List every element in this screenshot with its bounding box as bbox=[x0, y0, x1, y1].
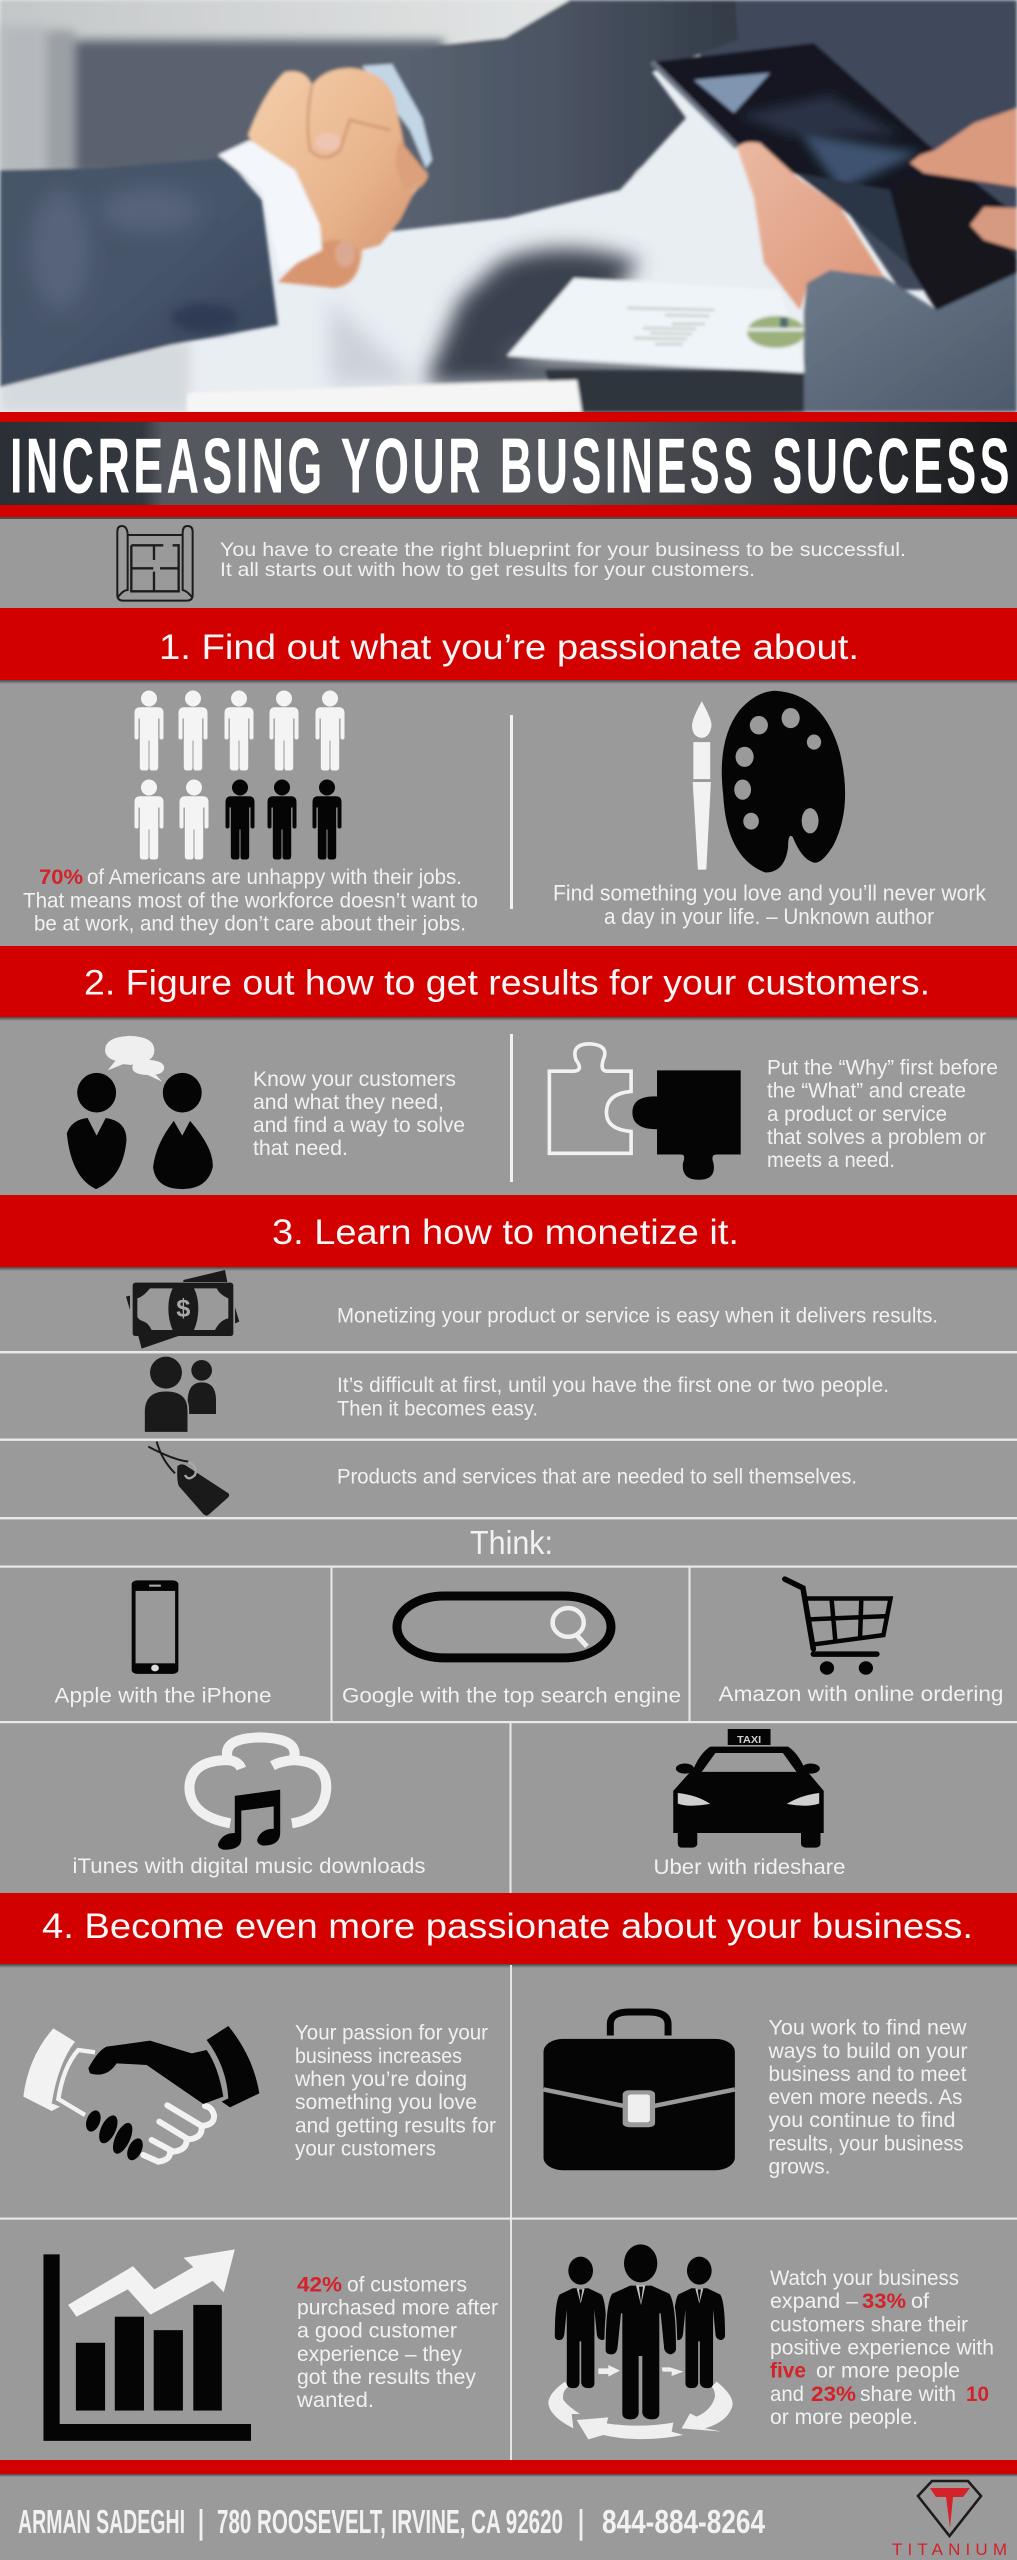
icon: taxi: TAXI bbox=[737, 1734, 761, 1746]
text: 33% and 23% statistics: 10 bbox=[966, 2383, 989, 2406]
logo: Titanium bbox=[892, 2481, 1007, 2559]
text: quote: a day in your life. – Unknown author bbox=[604, 904, 934, 929]
text: 33% and 23% statistics bbox=[770, 2267, 994, 2429]
text: 33% and 23% statistics: 23% bbox=[811, 2383, 856, 2406]
text: 42% statistic: a good customer bbox=[297, 2320, 457, 2342]
text: 42% statistic: 42% bbox=[297, 2274, 342, 2296]
text: 70% statistic: be at work, and they don’t care about their jobs. bbox=[34, 912, 466, 936]
icon: paintbrush and palette bbox=[692, 691, 845, 873]
icon: search bar bbox=[397, 1596, 611, 1658]
text: build: business and to meet bbox=[768, 2063, 967, 2086]
text: build bbox=[767, 2016, 968, 2178]
icon: two people talking bbox=[67, 1036, 213, 1189]
text: 33% and 23% statistics: expand – bbox=[770, 2290, 858, 2313]
text: build: grows. bbox=[768, 2156, 830, 2178]
text: Apple: Apple with the iPhone bbox=[54, 1684, 272, 1708]
heading: think: Think: bbox=[470, 1524, 553, 1561]
text: 33% and 23% statistics: 33% bbox=[862, 2290, 906, 2313]
text: 33% and 23% statistics: share with bbox=[860, 2383, 956, 2406]
footer contact line: 844-884-8264 bbox=[602, 2503, 766, 2540]
text: Uber: Uber with rideshare bbox=[654, 1856, 846, 1879]
text: 42% statistic: experience – they bbox=[297, 2343, 462, 2366]
heading 2: 2. Figure out how to get results for your customers. bbox=[84, 964, 930, 1002]
shaking hands bbox=[248, 68, 428, 288]
text: first customers: Then it becomes easy. bbox=[337, 1396, 538, 1420]
footer band bbox=[0, 2460, 1017, 2477]
text: know your customers: that need. bbox=[253, 1137, 348, 1160]
footer contact line: | bbox=[198, 2503, 204, 2540]
text: why first: Put the “Why” first before bbox=[767, 1056, 998, 1080]
title banner bbox=[0, 412, 1017, 519]
icon: iPhone bbox=[132, 1580, 178, 1674]
text: 42% statistic: purchased more after bbox=[297, 2296, 498, 2320]
text: first customers bbox=[337, 1373, 889, 1420]
icon: shopping cart bbox=[785, 1579, 891, 1675]
paper bbox=[507, 278, 806, 373]
text: know your customers: and find a way to solve bbox=[253, 1114, 465, 1137]
text: quote bbox=[553, 880, 987, 929]
text: 70% statistic: 70% bbox=[39, 866, 83, 889]
icon: ten people, three highlighted bbox=[134, 690, 344, 860]
dark table bbox=[425, 248, 805, 412]
footer contact line: ARMAN SADEGHI bbox=[18, 2503, 185, 2540]
text: quote: Find something you love and you’ll never work bbox=[553, 880, 987, 906]
table strip behind right hand bbox=[797, 173, 910, 267]
text: why first: that solves a problem or bbox=[767, 1126, 986, 1149]
icon: briefcase bbox=[544, 2012, 735, 2170]
text: passion: and getting results for bbox=[295, 2114, 496, 2138]
text: 42% statistic: got the results they bbox=[297, 2366, 477, 2389]
heading 2 bbox=[0, 946, 1017, 1021]
text: build: ways to build on your bbox=[767, 2040, 968, 2063]
text: know your customers: and what they need, bbox=[253, 1091, 444, 1114]
heading 1: 1. Find out what you’re passionate about. bbox=[159, 628, 859, 667]
text: Amazon: Amazon with online ordering bbox=[718, 1683, 1004, 1706]
dark suit upper right bbox=[700, 0, 1017, 290]
icon: two customers bbox=[144, 1357, 216, 1433]
intro text bbox=[220, 540, 906, 581]
text: Google: Google with the top search engine bbox=[342, 1684, 681, 1708]
dark fingers behind tablet bbox=[890, 180, 1017, 312]
logo: Titanium: TITANIUM bbox=[892, 2540, 1007, 2559]
text: passion bbox=[294, 2022, 496, 2160]
text: why first: the “What” and create bbox=[767, 1080, 966, 1102]
text: 33% and 23% statistics: five bbox=[770, 2360, 806, 2382]
intro text: You have to create the right blueprint for your business to be successful. bbox=[220, 540, 906, 561]
text: products: Products and services that are needed to sell themselves. bbox=[337, 1464, 857, 1488]
text: 33% and 23% statistics: or more people bbox=[816, 2360, 960, 2382]
icon: taxi bbox=[673, 1729, 824, 1848]
text: 33% and 23% statistics: or more people. bbox=[770, 2406, 918, 2429]
text: 42% statistic: wanted. bbox=[296, 2389, 374, 2412]
text: 42% statistic: of customers bbox=[347, 2274, 467, 2296]
text: passion: something you love bbox=[295, 2091, 477, 2114]
text: 33% and 23% statistics: Watch your business bbox=[770, 2267, 959, 2290]
heading 3 bbox=[0, 1195, 1017, 1271]
icon: price tag bbox=[148, 1442, 229, 1516]
icon: puzzle pieces bbox=[549, 1044, 741, 1180]
text: iTunes: iTunes with digital music downloads bbox=[72, 1855, 426, 1878]
intro text: It all starts out with how to get results for your customers. bbox=[220, 560, 755, 581]
text: why first bbox=[767, 1056, 998, 1172]
right jacket sleeve bbox=[385, 0, 738, 232]
left sleeve bbox=[0, 158, 278, 387]
text: passion: Your passion for your bbox=[295, 2022, 488, 2044]
text: 42% statistic bbox=[296, 2274, 498, 2412]
text: 70% statistic: of Americans are unhappy with their jobs. bbox=[87, 866, 462, 889]
text: why first: meets a need. bbox=[767, 1149, 895, 1172]
icon: blueprint bbox=[117, 526, 193, 601]
right lower sleeve bbox=[804, 270, 1017, 412]
white shirt cuff bbox=[218, 140, 322, 272]
text: build: You work to find new bbox=[768, 2016, 967, 2040]
text: first customers: It’s difficult at first, until you have the first one or two people. bbox=[337, 1373, 889, 1397]
text: why first: a product or service bbox=[767, 1103, 947, 1126]
text: 33% and 23% statistics: and bbox=[770, 2383, 804, 2406]
hero photo: handshake over business table bbox=[0, 0, 1017, 412]
text: 33% and 23% statistics: customers share their bbox=[770, 2314, 968, 2336]
icon: cloud with music note bbox=[189, 1737, 326, 1850]
text: build: you continue to find bbox=[768, 2109, 956, 2132]
text: build: results, your business bbox=[768, 2132, 964, 2156]
text: passion: business increases bbox=[295, 2045, 462, 2068]
right hand bbox=[737, 142, 884, 310]
text: monetizing: Monetizing your product or service is easy when it delivers results. bbox=[337, 1304, 938, 1328]
text: 33% and 23% statistics: positive experience with bbox=[770, 2336, 994, 2360]
chart: rising bars with arrow bbox=[43, 2249, 251, 2441]
heading 1 bbox=[0, 608, 1017, 684]
text: know your customers bbox=[253, 1068, 465, 1160]
text: know your customers: Know your customers bbox=[253, 1068, 456, 1091]
text: 33% and 23% statistics: of bbox=[911, 2290, 929, 2313]
icon: money bills bbox=[126, 1270, 239, 1349]
heading 4: 4. Become even more passionate about your business. bbox=[42, 1907, 973, 1946]
right fingers bbox=[910, 108, 1017, 187]
icon: handshake bbox=[23, 2026, 259, 2163]
heading 4 bbox=[0, 1893, 1017, 1968]
text: build: even more needs. As bbox=[768, 2086, 962, 2109]
tablet bbox=[652, 43, 1017, 255]
text: 70% statistic bbox=[23, 866, 478, 936]
text: passion: when you’re doing bbox=[294, 2068, 467, 2091]
text: 70% statistic: That means most of the workforce doesn’t want to bbox=[23, 890, 478, 912]
text: passion: your customers bbox=[295, 2138, 436, 2160]
heading 3: 3. Learn how to monetize it. bbox=[272, 1213, 739, 1252]
footer contact line: | bbox=[578, 2503, 584, 2540]
footer contact line: 780 ROOSEVELT, IRVINE, CA 92620 bbox=[217, 2503, 563, 2540]
icon: money bills: $ bbox=[176, 1295, 190, 1323]
icon: team with circular arrows bbox=[548, 2244, 733, 2439]
